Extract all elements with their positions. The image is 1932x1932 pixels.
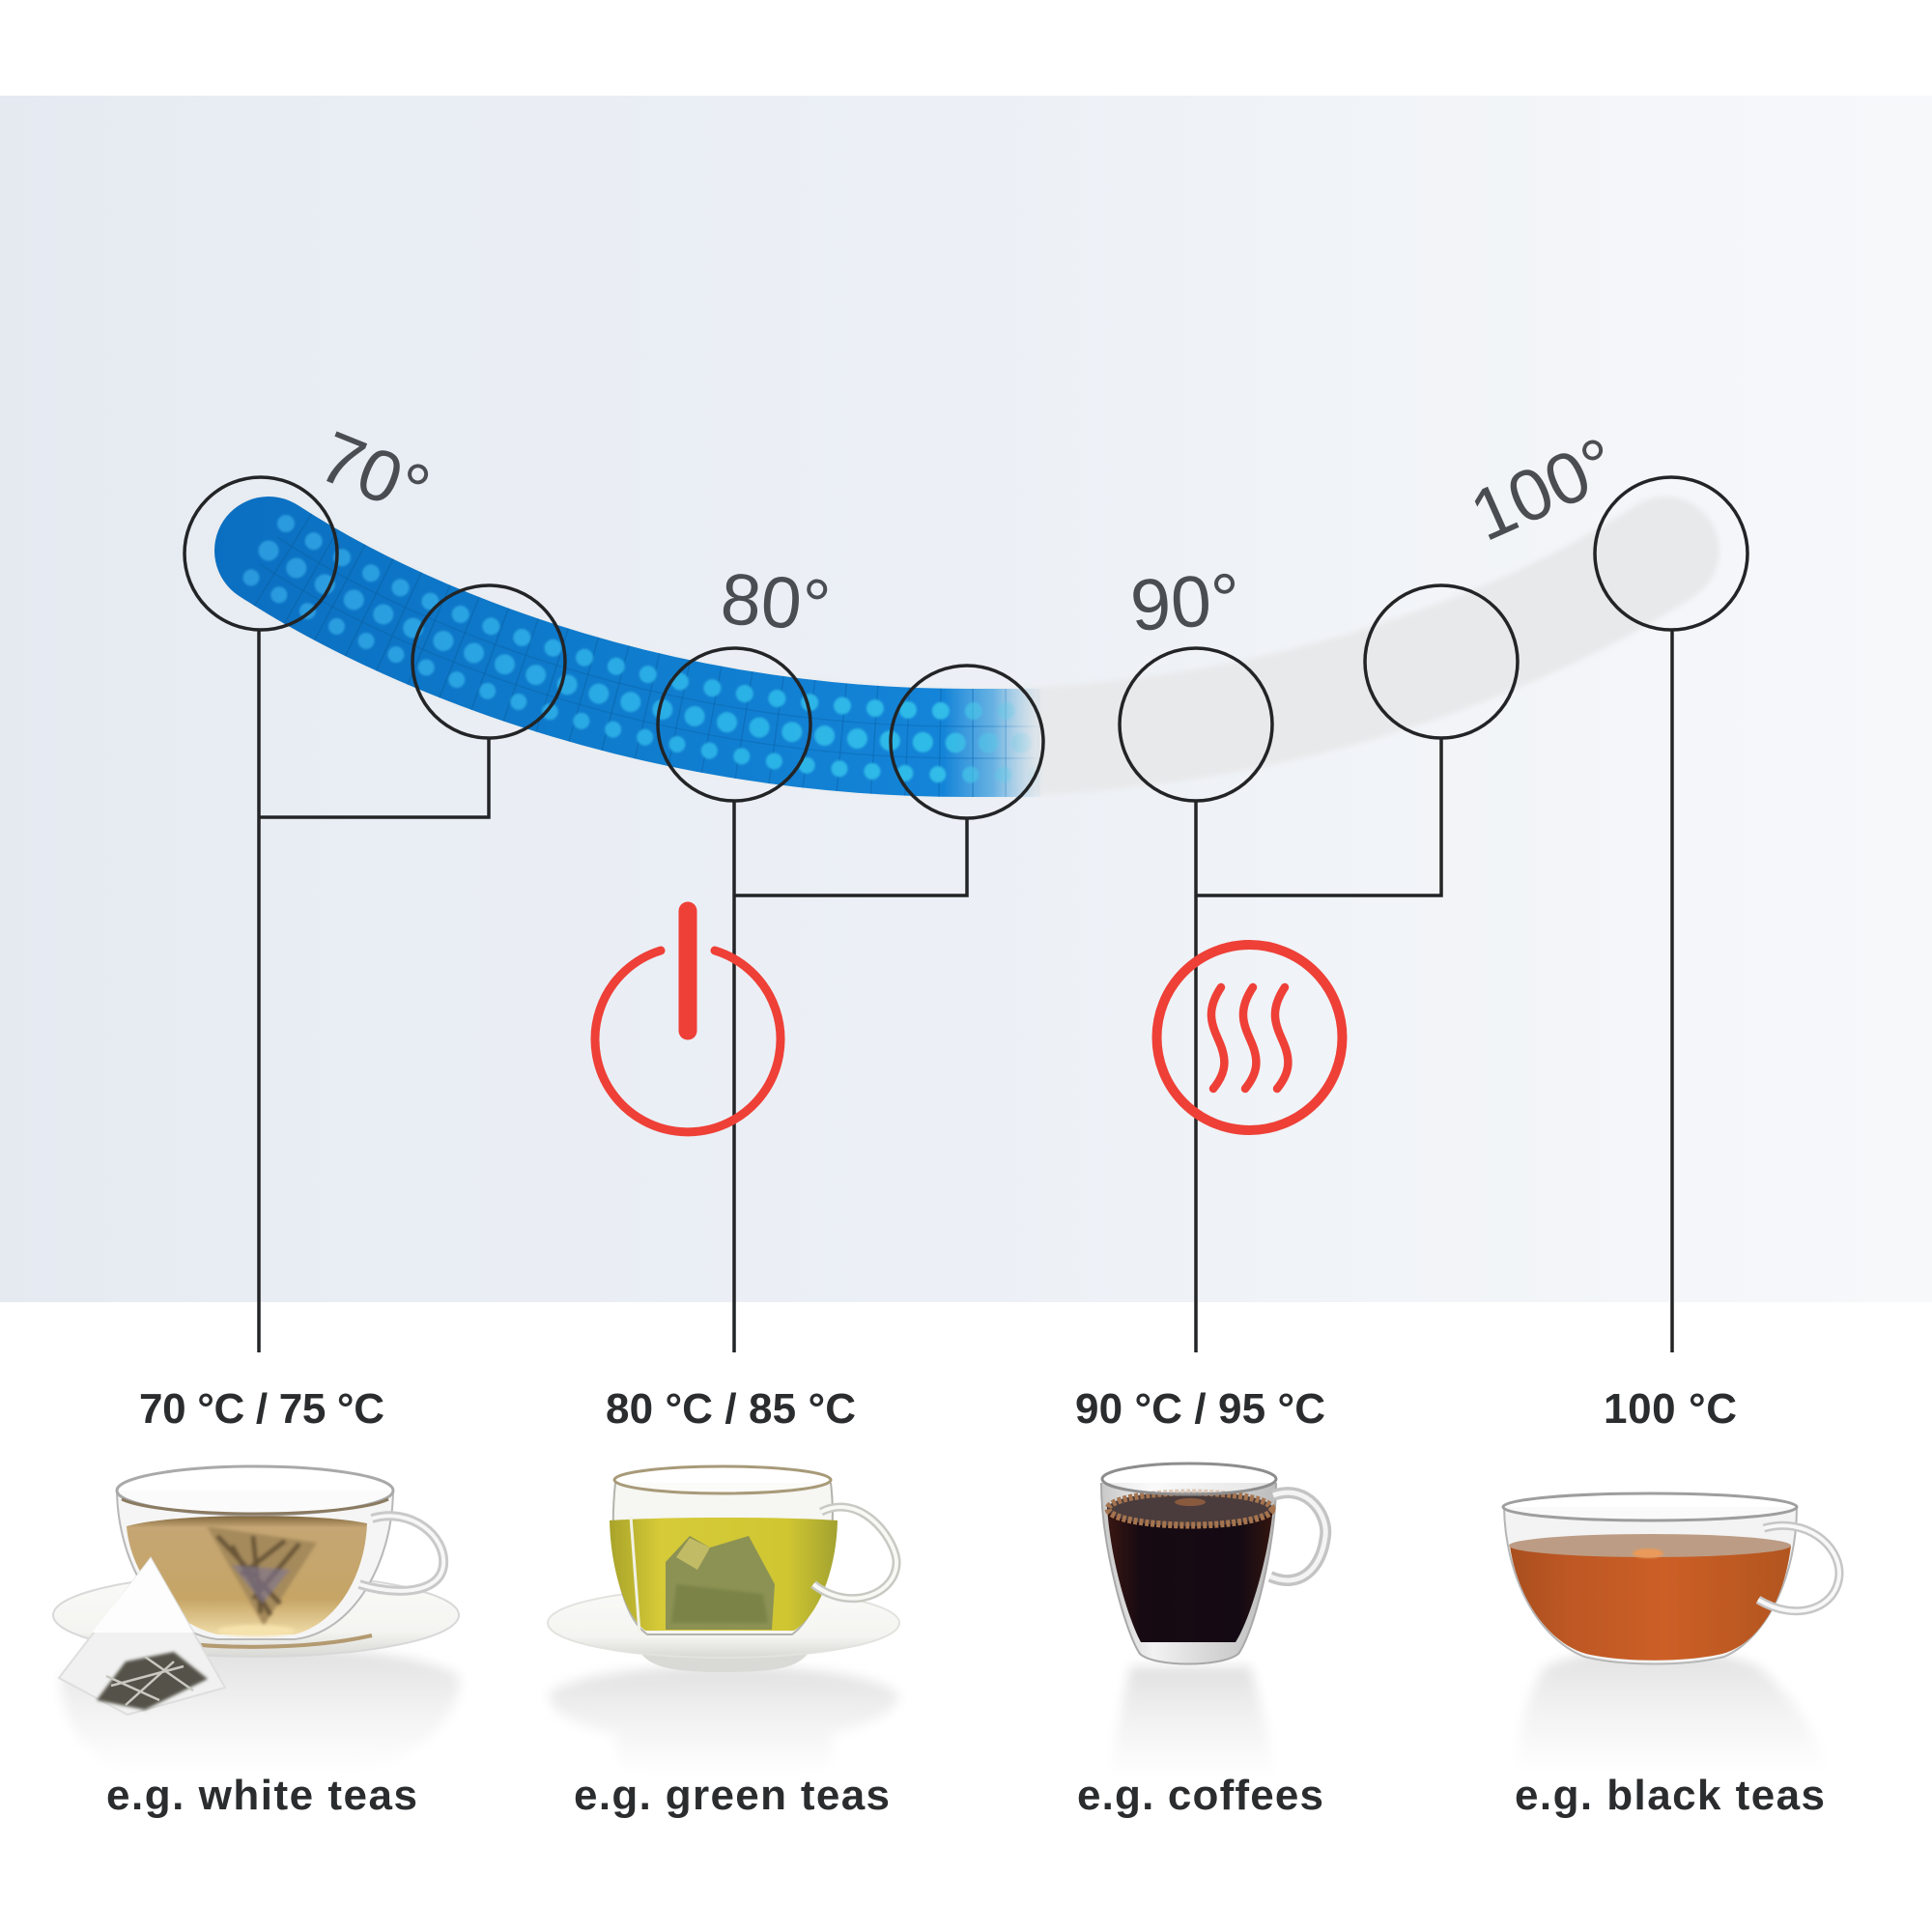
panel: background: [0, 96, 1932, 1302]
caption: green teas: e.g. green teas: [574, 1772, 890, 1819]
icon: power button: [595, 911, 781, 1132]
label: 80 degrees: 80°: [718, 557, 834, 646]
caption: black teas: e.g. black teas: [1515, 1772, 1825, 1819]
image: black tea cup: [1503, 1493, 1839, 1773]
caption: coffees: e.g. coffees: [1077, 1772, 1323, 1819]
heading: 90/95: 90 °C / 95 °C: [1075, 1385, 1325, 1433]
icon: keep warm: [1157, 945, 1343, 1130]
image: coffee glass: [1101, 1463, 1325, 1777]
caption: white teas: e.g. white teas: [106, 1772, 417, 1819]
label: 100 degrees: 100°: [1459, 421, 1629, 556]
heading: 80/85: 80 °C / 85 °C: [606, 1385, 856, 1433]
heading: 100: 100 °C: [1604, 1385, 1737, 1433]
grey unheated band: [269, 551, 1665, 743]
temperature marker circles and connectors: [185, 477, 1747, 1352]
image: green tea cup with tea bag: [548, 1466, 899, 1776]
heading: 70/75: 70 °C / 75 °C: [139, 1385, 384, 1433]
label: 70 degrees: 70°: [309, 415, 440, 531]
blue heated band: [251, 524, 1043, 775]
image: white tea cup with tea bag: [53, 1466, 459, 1773]
label: 90 degrees: 90°: [1127, 557, 1243, 646]
